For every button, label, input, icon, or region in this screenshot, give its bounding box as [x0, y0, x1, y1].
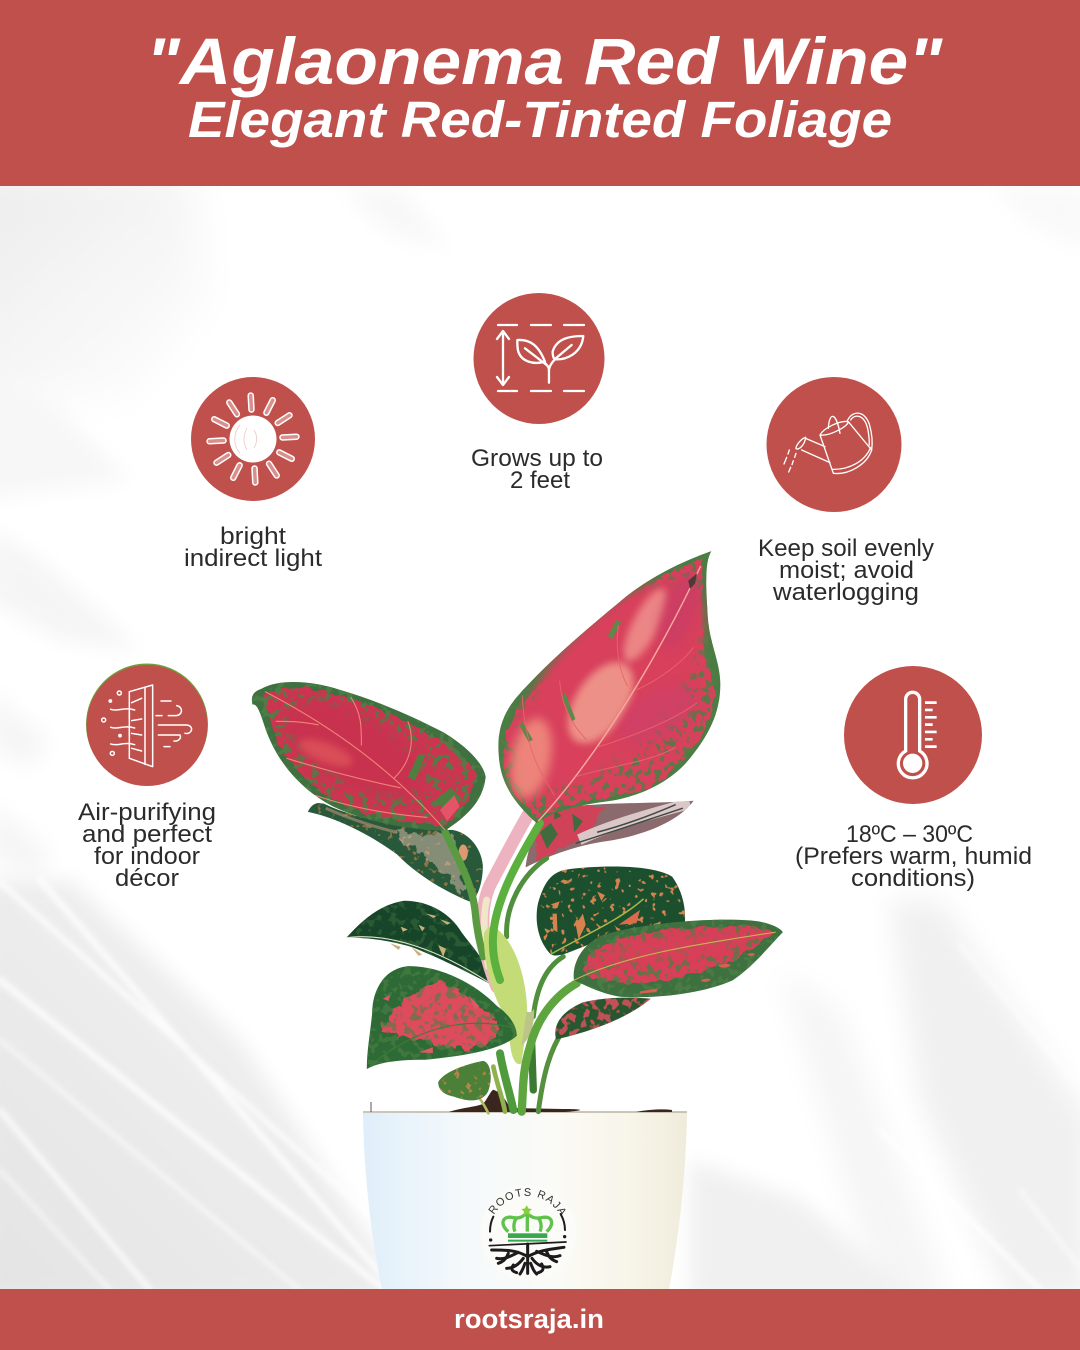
label: air purifying: décor [115, 865, 179, 892]
stems and stalk [445, 812, 577, 1113]
leaf: small bottom [438, 1060, 491, 1100]
label: watering: waterlogging [772, 579, 919, 606]
label: watering: moist; avoid [779, 557, 914, 584]
header band [0, 0, 1080, 186]
soil [449, 1090, 672, 1112]
label: air purifying: for indoor [94, 843, 200, 870]
icon: thermometer [844, 666, 982, 804]
label: height [471, 445, 603, 494]
title: "Aglaonema Red Wine" [146, 24, 943, 98]
plant [251, 549, 786, 1113]
icon: height [474, 293, 604, 424]
leaf: large top red [498, 551, 720, 823]
label: height: Grows up to [471, 445, 603, 472]
leaf: back left [308, 803, 483, 902]
label: watering: Keep soil evenly [758, 535, 934, 562]
pot logo [488, 1188, 567, 1276]
footer url: rootsraja.in [454, 1304, 604, 1334]
label: height: 2 feet [510, 467, 570, 494]
label: air purifying: Air-purifying [78, 799, 216, 826]
leaf: speckled dark right [536, 866, 686, 956]
logo: crown [503, 1205, 552, 1242]
logo: roots [489, 1214, 566, 1274]
leaf: dark left [346, 900, 489, 984]
label: light: bright [220, 523, 286, 550]
label: temperature: (Prefers warm, humid [795, 843, 1032, 870]
pot logo: ROOTS RAJA [488, 1188, 566, 1216]
leaf: lower left red [365, 965, 519, 1071]
pot [363, 1090, 687, 1290]
label: air purifying [78, 799, 216, 892]
label: temperature: conditions) [851, 865, 975, 892]
label: air purifying: and perfect [82, 821, 212, 848]
label: light [184, 523, 322, 572]
label: temperature: 18ºC – 30ºC [846, 821, 973, 848]
leaf: small lower right [554, 997, 651, 1041]
icon: air purifying [86, 664, 208, 786]
icon: watering can [766, 377, 902, 512]
logo: brand name [494, 1196, 560, 1215]
label: temperature [795, 821, 1032, 892]
leaf: back right striped [526, 801, 694, 867]
label: watering [758, 535, 934, 606]
footer band [0, 1289, 1080, 1350]
leaf: right red [574, 920, 783, 998]
leaf: upper left red [251, 679, 486, 832]
subtitle: Elegant Red-Tinted Foliage [188, 91, 892, 148]
icon: sun [191, 377, 315, 501]
label: light: indirect light [184, 545, 322, 572]
